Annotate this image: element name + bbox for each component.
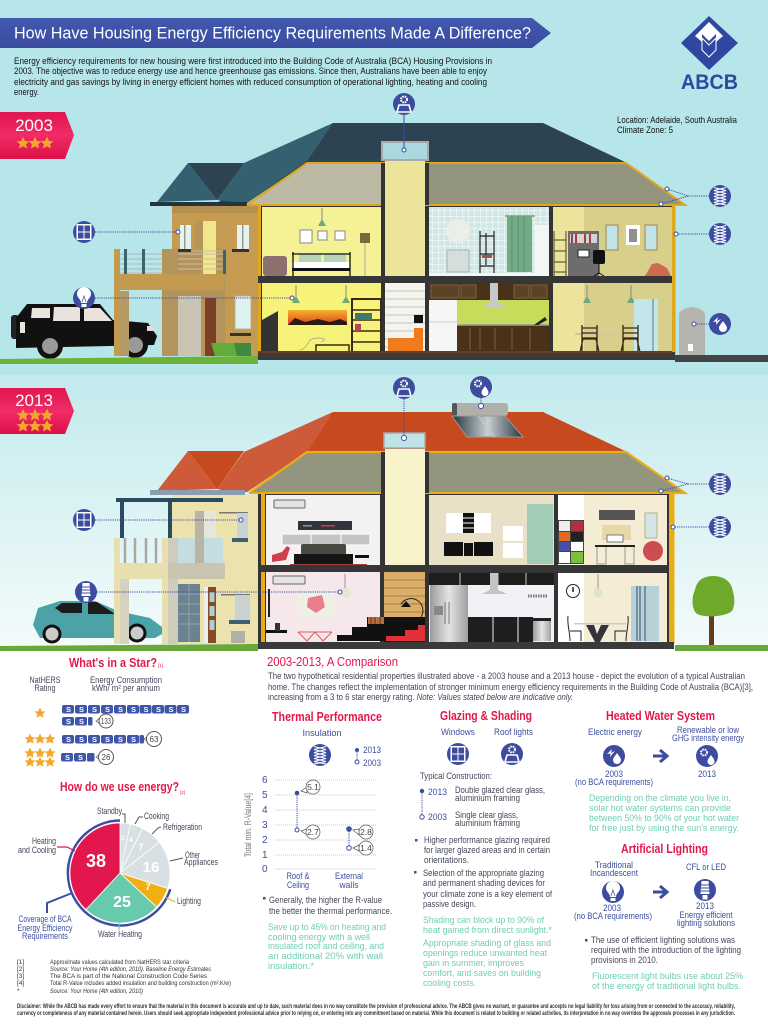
water savings: for free just by using the sun's energy. (589, 823, 739, 834)
bedroom 2003 (263, 208, 370, 276)
background: top sky (0, 0, 768, 380)
typical construction: aluminium framing (455, 818, 520, 828)
6 star row (24, 748, 114, 767)
panel: what's in a star (24, 655, 189, 767)
heading: thermal: Thermal Performance (272, 709, 382, 724)
lighting comparison: lighting solutions (677, 918, 735, 929)
column labels: kWh/ m² per annum (92, 683, 160, 693)
disclaimer (17, 1003, 735, 1017)
lighting comparison: 2013 (696, 901, 714, 912)
skylight 2013 (384, 433, 425, 448)
callout: lighting 2013 (75, 581, 342, 603)
intro paragraph: 2003. The objective was to reduce energy use and hence greenhouse gas emissions. Since then, Australians have been able to enjoy (14, 66, 487, 77)
insulation label and icon (302, 728, 342, 766)
location note: Climate Zone: 5 (617, 125, 673, 136)
heading: glazing: Glazing & Shading (440, 708, 532, 723)
thermal saving: insulated roof and ceiling, and (268, 941, 384, 952)
sofa and lamp 2003 (388, 315, 423, 351)
dot chart: R-values: walls (339, 880, 359, 891)
typical construction: aluminium framing (455, 793, 520, 803)
callout: roof insulation 2003 (659, 185, 731, 207)
pie labels: and Cooling (18, 845, 56, 855)
1 star row: 133 (101, 717, 111, 726)
bathroom 2013 (444, 504, 553, 564)
typical construction: Single clear glass, (455, 810, 518, 820)
panel: thermal performance (243, 709, 392, 972)
badge: 2003: 2003 (15, 116, 53, 135)
glazing savings: heat gained from direct sunlight.* (423, 925, 552, 936)
title banner: How Have Housing Energy Efficiency Requirements Made A Difference? (14, 24, 531, 42)
water comparison: 2003 (605, 769, 623, 780)
attic 2013 (249, 452, 685, 493)
glazing bullets: passive design. (423, 899, 476, 909)
callout: solar 2013 (470, 376, 492, 408)
pie labels: Energy Efficiency (18, 923, 73, 934)
pie values: 7 (138, 842, 144, 852)
water comparison: GHG intensity energy (672, 733, 744, 744)
footnotes: * (17, 988, 20, 995)
dot chart: R-values: 3 (262, 820, 268, 831)
lighting comparison: Energy efficient (680, 910, 733, 921)
lower room 2013 (266, 574, 400, 641)
chart legend: 2003 (363, 758, 381, 769)
heading: what's in a star: What's in a Star? (69, 655, 157, 670)
pie labels: Other (185, 850, 200, 860)
column labels: NatHERS (30, 675, 60, 685)
footnotes: Approximate values calculated from NatHERS star criteria (50, 959, 189, 966)
callout: roof light 2013 (393, 377, 415, 440)
glazing bullets (414, 835, 552, 909)
pie values: 7 (145, 882, 151, 892)
panel: comparison intro (267, 654, 753, 702)
glazing bullets: Selection of the appropriate glazing (423, 868, 544, 878)
lighting comparison: (no BCA requirements) (574, 911, 652, 922)
thermal saving: an additional 20% with wall (268, 951, 383, 962)
dot chart: R-values: 5 (262, 790, 268, 801)
lighting comparison: Incandescent (590, 868, 638, 879)
intro paragraph: Energy efficiency requirements for new housing were first introduced into the Building Code of Australia (BCA) Housing Provisions in (14, 56, 492, 67)
chart legend: 2013 (363, 745, 381, 756)
badge: 2013: 2013 (15, 391, 53, 410)
lighting bullet: provisions in 2010. (591, 955, 658, 965)
water comparison: Electric energy (588, 727, 642, 738)
pie labels: Standby (97, 806, 122, 816)
pie labels: Lighting (177, 896, 201, 906)
typical construction: 2013 (428, 787, 447, 798)
thermal saving: Save up to 45% on heating and (268, 922, 386, 933)
thermal note (263, 895, 392, 916)
water comparison: (no BCA requirements) (575, 777, 653, 788)
water heater (679, 307, 705, 355)
callout: lighting 2003 (73, 287, 294, 309)
left wing 2013 (114, 495, 258, 644)
intro paragraph: energy. (14, 87, 39, 98)
footnotes: Source: Your Home (4th edition, 2010) (50, 988, 143, 995)
house 2003 (114, 123, 685, 360)
glazing savings: Appropriate shading of glass and (423, 938, 551, 949)
ground 2013 (0, 644, 768, 651)
insulation label and icon: Insulation (302, 728, 342, 739)
1 star row: SSSSSSSSSS (66, 705, 186, 714)
roof 2003 (150, 123, 625, 206)
intro paragraph (14, 56, 492, 98)
callout: water heater 2003 (692, 313, 731, 335)
pie values: 2 (121, 836, 125, 842)
dot chart: R-values: 2 (262, 835, 268, 846)
left wing 2003 (114, 206, 258, 356)
footnotes: The BCA is part of the National Construction Code Series (50, 973, 208, 980)
lighting savings: Fluorescent light bulbs use about 25% (592, 971, 744, 982)
lighting savings (592, 971, 744, 992)
bathroom 2003 (429, 216, 549, 276)
heading: lighting: Artificial Lighting (621, 841, 708, 856)
dot chart: R-values (243, 775, 376, 891)
living room 2003 (262, 285, 381, 352)
dot chart: R-values: External (335, 871, 363, 882)
roof 2013 (150, 412, 625, 495)
chart legend (355, 745, 381, 769)
kitchen 2003 (429, 283, 549, 352)
callout: roof insulation 2013 (659, 473, 731, 495)
lighting bullet: The use of efficient lighting solutions was (591, 935, 735, 945)
location note: Location: Adelaide, South Australia (617, 115, 738, 126)
living room 2013 (272, 500, 370, 565)
water comparison: 2013 (698, 769, 716, 780)
house 2013 (114, 403, 685, 649)
lighting comparison: Traditional (595, 860, 633, 871)
3 star row (24, 732, 162, 746)
ground 2003 (0, 355, 768, 364)
water savings (589, 793, 739, 834)
glazing bullets: for larger glazed areas and in certain (424, 845, 550, 855)
glazing savings: cooling costs. (423, 978, 476, 989)
panel: how do we use energy (18, 779, 218, 942)
pie labels: Water Heating (98, 929, 142, 939)
pie labels: Heating (32, 836, 56, 846)
lighting comparison: 2003 (603, 903, 621, 914)
thermal saving (268, 922, 386, 972)
dot chart: R-values: 6 (262, 775, 268, 786)
ABCB logo: ABCB (681, 71, 738, 94)
pie labels: Refrigeration (163, 822, 202, 832)
title banner (0, 18, 551, 48)
car: teal hatchback (33, 601, 162, 644)
1 star row: SS (66, 717, 84, 726)
dot chart: R-values: 2.8 (360, 827, 372, 837)
callout: window 2013 (73, 509, 243, 531)
water savings: between 50% to 90% of your hot water (589, 813, 739, 824)
callout: wall insulation 2003 (674, 223, 731, 245)
glazing icons (441, 727, 533, 765)
dot chart: R-values: Ceiling (287, 880, 309, 891)
pie values: 38 (86, 851, 106, 871)
tree (693, 576, 734, 646)
pie labels: Requirements (22, 931, 68, 942)
heading: energy: How do we use energy? (60, 779, 179, 794)
thermal saving: insulation.* (268, 961, 314, 972)
glazing savings: Shading can block up to 90% of (423, 915, 544, 926)
kitchen 2013 (429, 573, 554, 642)
lighting comparison (574, 860, 735, 929)
footnotes: [4] (17, 980, 24, 987)
pie labels: Coverage of BCA (18, 914, 72, 925)
stair wood and lamp 2013 (384, 599, 425, 642)
dot chart: R-values: 0 (262, 864, 268, 875)
pie chart (70, 823, 170, 923)
floor bars 2013 (258, 565, 674, 649)
badge: 2003 (0, 112, 74, 159)
callout: wall insulation 2013 (671, 516, 731, 538)
dot chart: R-values: 4 (262, 805, 268, 816)
6 star row: 26 (102, 753, 111, 762)
pie labels (18, 806, 218, 942)
typical construction: 2003 (428, 812, 447, 823)
lighting bullet (585, 935, 741, 965)
dot chart: R-values: 1.4 (360, 843, 372, 853)
glazing bullets: your climate zone is a key element of (423, 889, 552, 899)
ABCB logo (681, 16, 738, 94)
typical construction: Typical Construction: (420, 771, 492, 781)
lighting bullet: required with the introduction of the lighting (591, 945, 741, 955)
typical construction (420, 771, 545, 828)
callout: roof light 2003 (393, 93, 415, 152)
thermal note: Generally, the higher the R-value (269, 895, 382, 905)
heading: energy: [2] (180, 790, 185, 795)
study 2013 (558, 510, 663, 564)
badge: 2013 (0, 388, 74, 434)
heading: water: Heated Water System (606, 708, 715, 723)
location note (617, 115, 738, 136)
heading: what's in a star: [1] (158, 663, 163, 668)
3 star row: 63 (150, 735, 159, 744)
glazing savings: openings reduce unwanted heat (423, 948, 547, 959)
footnotes: [2] (17, 966, 24, 973)
dining 2003 (575, 285, 658, 352)
comparison paragraph (268, 671, 753, 702)
footnotes: Source: Your Home (4th edition, 2010). Baseline Energy Estimates (50, 966, 212, 973)
dot chart: R-values: 5.1 (307, 782, 319, 792)
pie labels: Cooking (144, 811, 169, 821)
coverage arc (68, 820, 170, 925)
glazing bullets: Higher performance glazing required (424, 835, 550, 845)
dot chart: R-values: Total min. R-Value[4] (243, 793, 254, 857)
intro paragraph: electricity and gas savings by living in energy efficient homes with reduced consumption of operational lighting, heating and cooling (14, 77, 487, 88)
water comparison (575, 725, 744, 788)
pie values: 25 (113, 894, 131, 911)
glazing bullets: orientations. (424, 855, 469, 865)
floor bars 2003 (258, 276, 675, 360)
panel: glazing and shading (414, 708, 552, 989)
rooms 2003 shell (258, 160, 676, 355)
glazing icons: Roof lights (494, 727, 533, 738)
footnotes (17, 959, 231, 995)
glazing bullets: and permanent shading devices for (423, 878, 545, 888)
glazing savings: comfort, and saves on building (423, 968, 541, 979)
glazing savings: gain in summer, improves (423, 958, 524, 969)
footnotes: [1] (17, 959, 24, 966)
column labels: Rating (34, 683, 56, 693)
typical construction: Double glazed clear glass, (455, 785, 545, 795)
attic 2003 (247, 163, 685, 205)
dot chart: R-values: 1 (262, 850, 268, 861)
footnotes: [3] (17, 973, 24, 980)
footnotes: Total R-Value includes added insulation and building construction (m².K/w) (50, 980, 231, 987)
pie values: 4 (129, 837, 133, 844)
car: black SUV (11, 304, 157, 359)
dining 2013 (566, 574, 659, 642)
callout: window 2003 (73, 221, 180, 243)
glazing icons: Windows (441, 727, 475, 738)
background: lower sky (0, 375, 768, 650)
heading: comparison: 2003-2013, A Comparison (267, 654, 398, 669)
pie labels: Appliances (184, 857, 218, 867)
3 star row: SSSSSS (66, 735, 136, 744)
comparison paragraph: increasing from a 3 to 6 star energy rating. Note: Values stated below are indicative only. (268, 692, 573, 702)
1 star row (34, 705, 189, 728)
glazing savings (423, 915, 552, 989)
dot chart: R-values: 2.7 (307, 827, 319, 837)
lighting comparison: CFL or LED (686, 862, 726, 873)
rooms 2013 shell (258, 449, 674, 644)
panel: artificial lighting (574, 841, 744, 992)
6 star row: SS (65, 753, 83, 762)
lighting savings: of the energy of traditional light bulbs. (592, 981, 741, 992)
dot chart: R-values: Roof & (286, 871, 310, 882)
pie values: 16 (143, 859, 159, 876)
pie values (86, 836, 159, 911)
thermal note: the better the thermal performance. (269, 906, 392, 916)
water comparison: Renewable or low (677, 725, 739, 736)
skylight 2003 (382, 142, 428, 160)
study 2003 (554, 225, 671, 276)
thermal saving: cooling energy with a well (268, 932, 370, 943)
column labels (30, 675, 162, 693)
water savings: solar hot water systems can provide (589, 803, 731, 814)
solar water heater (452, 403, 523, 437)
panel: heated water system (575, 708, 744, 834)
water savings: Depending on the climate you live in, (589, 793, 731, 804)
column labels: Energy Consumption (90, 675, 162, 685)
